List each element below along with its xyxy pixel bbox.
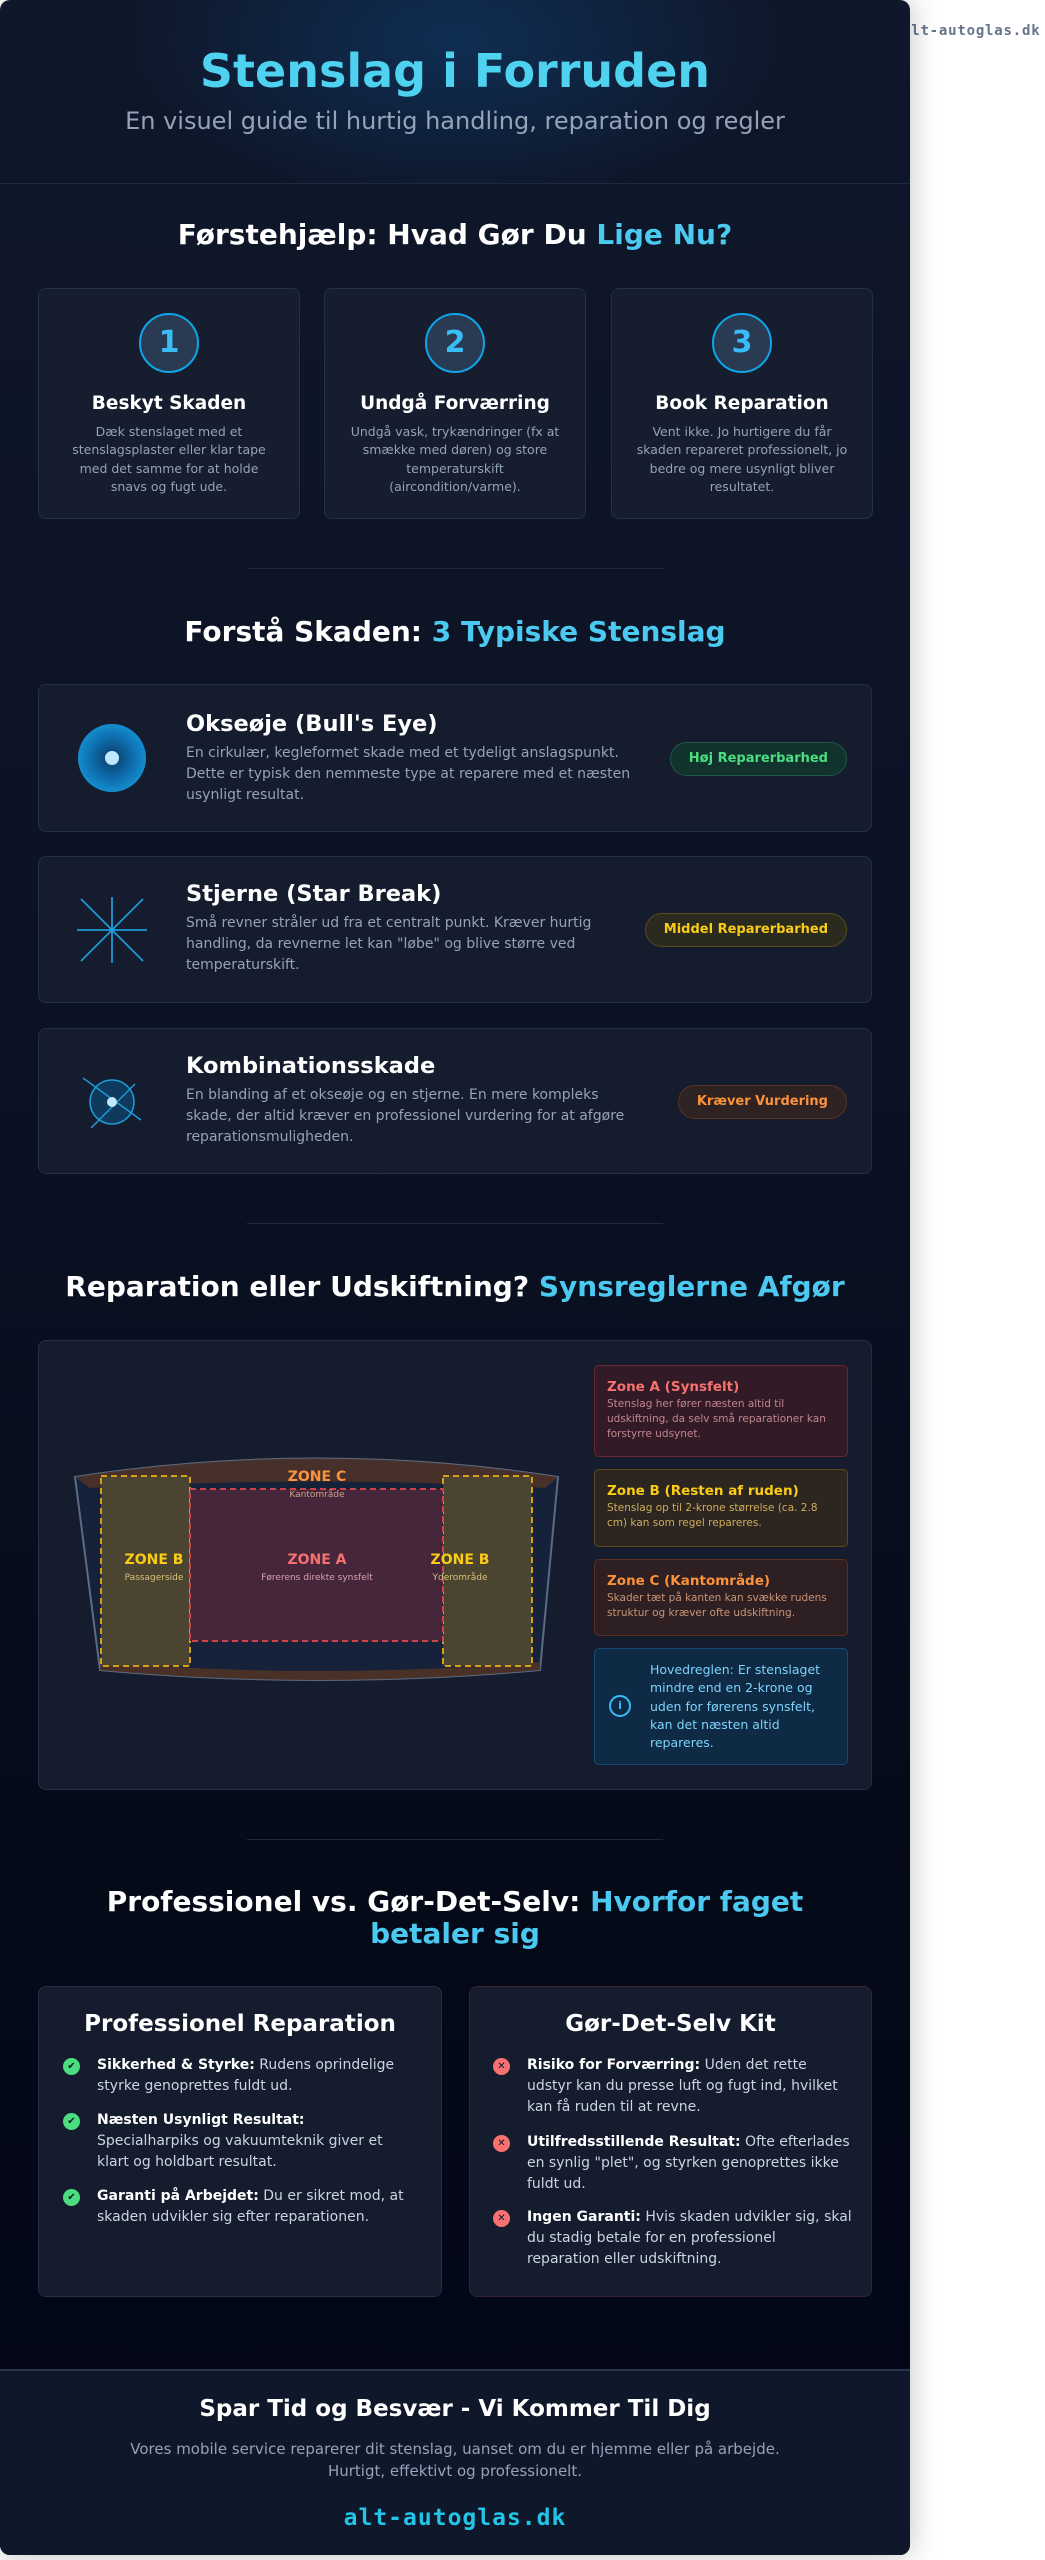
step 2: 2 <box>445 325 465 360</box>
step 1: Dæk stenslaget med et stenslagsplaster eller klar tape med det samme for at holde snavs og fugt ude. <box>72 424 266 494</box>
step 1 <box>38 288 300 519</box>
windshield diagram: Passagerside <box>125 1573 184 1583</box>
badge: assessment: Kræver Vurdering <box>697 1094 828 1109</box>
footer: alt-autoglas.dk <box>344 2505 566 2531</box>
footer: Hurtigt, effektivt og professionelt. <box>328 2462 582 2480</box>
panel: professional: ✔ <box>67 2192 76 2203</box>
panel: diy: Ingen Garanti: Hvis skaden udvikler sig, skal du stadig betale for en professionel reparation eller udskiftning. <box>527 2209 852 2267</box>
panel: professional: Professionel Reparation <box>84 2011 396 2037</box>
zone A box: Zone A (Synsfelt) <box>607 1379 739 1395</box>
step 3: Vent ikke. Jo hurtigere du får skaden repareret professionelt, jo bedre og mere usynligt bliver resultatet. <box>637 424 847 494</box>
step 2 <box>324 288 586 519</box>
windshield diagram: ZONE C <box>288 1469 346 1485</box>
zone A box <box>594 1365 848 1457</box>
zone C box: Skader tæt på kanten kan svække rudens struktur og kræver ofte udskiftning. <box>607 1592 827 1619</box>
panel: professional: ✔ <box>67 2061 76 2072</box>
badge: high <box>670 742 847 776</box>
windshield diagram <box>74 1458 559 1681</box>
damage: bull's eye: En cirkulær, kegleformet skade med et tydeligt anslagspunkt. Dette er typisk den nemmeste type at reparere med et næsten usynligt resultat. <box>186 745 630 803</box>
panel: diy: Gør-Det-Selv Kit <box>565 2011 776 2037</box>
step 2: Undgå Forværring <box>360 393 550 414</box>
panel: diy: Risiko for Forværring: Uden det rette udstyr kan du presse luft og fugt ind, hvilket kan få ruden til at revne. <box>527 2057 838 2115</box>
heading: pro vs diy: Professionel vs. Gør-Det-Selv: Hvorfor faget <box>107 1885 803 1918</box>
icon: star <box>77 897 147 963</box>
icon: info: i <box>618 1699 622 1712</box>
panel: professional: Garanti på Arbejdet: Du er sikret mod, at skaden udvikler sig efter reparationen. <box>97 2188 404 2225</box>
windshield diagram: ZONE A <box>287 1552 347 1568</box>
side brand label: alt-autoglas.dk <box>902 23 1040 39</box>
footer: Vores mobile service reparerer dit stenslag, uanset om du er hjemme eller på arbejde. <box>130 2440 780 2458</box>
heading: first aid: Førstehjælp: Hvad Gør Du Lige Nu? <box>178 218 732 251</box>
badge: medium <box>645 913 847 947</box>
zone A box: Stenslag her fører næsten altid til udskiftning, da selv små reparationer kan forstyrre udsynet. <box>607 1398 826 1440</box>
damage: bull's eye: Okseøje (Bull's Eye) <box>186 711 438 737</box>
windshield diagram: Yderområde <box>432 1572 488 1583</box>
heading: pro vs diy <box>107 1885 803 1950</box>
zone C box <box>594 1559 848 1636</box>
windshield diagram: ZONE B <box>431 1552 489 1568</box>
panel: diy: Utilfredsstillende Resultat: Ofte efterlades en synlig "plet", og styrken genoprettes ikke fuldt ud. <box>527 2134 850 2192</box>
damage: combination <box>38 1028 872 1174</box>
panel: diy: ✕ <box>497 2213 506 2224</box>
badge: assessment <box>678 1085 847 1119</box>
zone B box <box>594 1469 848 1547</box>
panel: diy: ✕ <box>497 2061 506 2072</box>
step 3: Book Reparation <box>655 393 829 414</box>
info callout: Hovedreglen: Er stenslaget mindre end en 2-krone og uden for førerens synsfelt, kan det næsten altid repareres. <box>650 1662 820 1750</box>
panel: professional: ✔ <box>67 2116 76 2127</box>
damage: star <box>38 856 872 1003</box>
info callout <box>594 1648 848 1765</box>
windshield diagram: Førerens direkte synsfelt <box>261 1573 373 1583</box>
panel: professional: Næsten Usynligt Resultat: Specialharpiks og vakuumteknik giver et klart og holdbart resultat. <box>97 2112 383 2170</box>
panel: diy <box>469 1986 872 2297</box>
windshield diagram: Kantområde <box>289 1489 345 1500</box>
icon: info <box>609 1695 631 1717</box>
damage: star: Små revner stråler ud fra et centralt punkt. Kræver hurtig handling, da revnerne let kan "løbe" og blive større ved temperaturskift. <box>186 915 591 973</box>
damage: bull's eye <box>38 684 872 832</box>
damage: combination: Kombinationsskade <box>186 1053 435 1079</box>
icon: combination <box>82 1078 142 1128</box>
panel: zones <box>38 1340 872 1790</box>
panel: professional <box>38 1986 442 2297</box>
panel: professional: Sikkerhed & Styrke: Rudens oprindelige styrke genoprettes fuldt ud. <box>97 2057 394 2094</box>
panel: diy: ✕ <box>497 2138 506 2149</box>
windshield diagram: ZONE B <box>125 1552 183 1568</box>
icon: bull's eye <box>78 724 146 792</box>
heading: pro vs diy: betaler sig <box>370 1917 540 1950</box>
zone B box: Stenslag op til 2-krone størrelse (ca. 2.8 cm) kan som regel repareres. <box>607 1502 818 1529</box>
badge: high: Høj Reparerbarhed <box>689 751 828 766</box>
step 1: Beskyt Skaden <box>92 393 246 414</box>
step 1: 1 <box>159 325 179 360</box>
footer <box>0 2369 910 2555</box>
step 3 <box>611 288 873 519</box>
subtitle: En visuel guide til hurtig handling, reparation og regler <box>125 107 785 135</box>
step 3: 3 <box>732 325 752 360</box>
damage: combination: En blanding af et okseøje og en stjerne. En mere kompleks skade, der altid kræver en professionel vurdering for at afgøre reparationsmuligheden. <box>186 1087 624 1145</box>
heading: repair or replace: Reparation eller Udskiftning? Synsreglerne Afgør <box>65 1270 845 1303</box>
step 2: Undgå vask, trykændringer (fx at smække med døren) og store temperaturskift (aircondition/varme). <box>351 424 559 494</box>
header glow <box>0 0 910 183</box>
zone B box: Zone B (Resten af ruden) <box>607 1483 799 1499</box>
zone C box: Zone C (Kantområde) <box>607 1573 770 1589</box>
title: Stenslag i Forruden <box>200 44 710 98</box>
badge: medium: Middel Reparerbarhed <box>664 922 828 937</box>
footer: Spar Tid og Besvær - Vi Kommer Til Dig <box>199 2396 711 2422</box>
damage: star: Stjerne (Star Break) <box>186 881 441 907</box>
heading: understand damage: Forstå Skaden: 3 Typiske Stenslag <box>184 615 726 648</box>
